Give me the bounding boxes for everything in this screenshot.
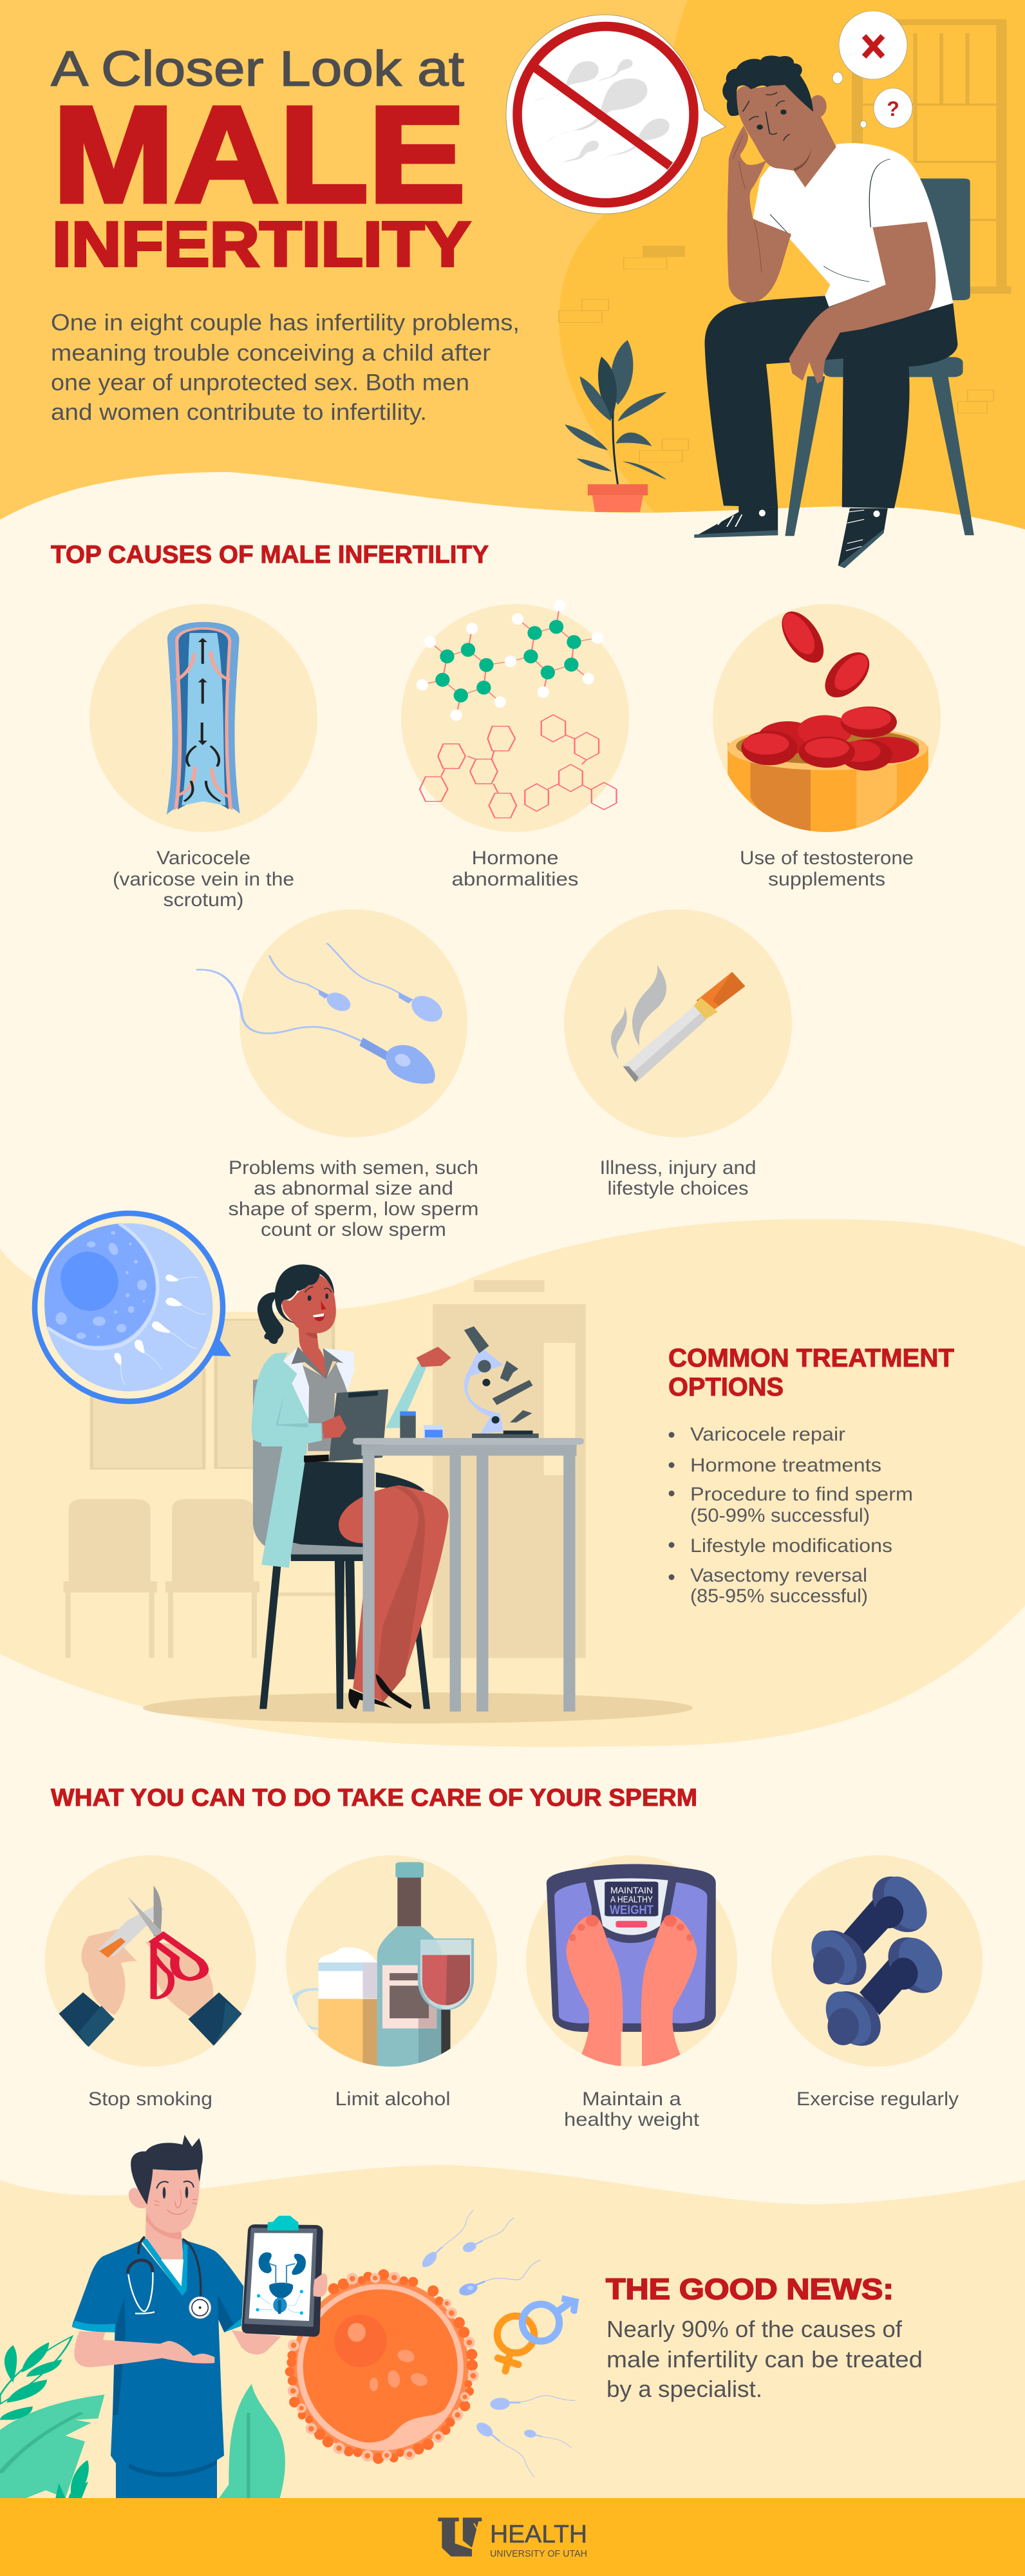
egg pale bump centres <box>290 2275 476 2459</box>
treatment list: Lifestyle modifications <box>690 1535 892 1557</box>
v-neck trim <box>142 2238 188 2296</box>
bubble shape <box>506 15 726 214</box>
scale display text: MAINTAIN <box>610 1885 653 1895</box>
thought bubbles: ? <box>887 97 899 120</box>
treatment list: (50-99% successful) <box>690 1505 870 1526</box>
no sperm speech bubble <box>506 15 726 214</box>
logo <box>438 2517 587 2559</box>
label: semen: Problems with semen, such <box>229 1157 478 1179</box>
panel: treatment background wave <box>0 1219 1025 1747</box>
title line 2: MALE <box>53 78 465 231</box>
neck <box>298 1325 326 1379</box>
chair <box>253 1379 430 1709</box>
ponytail <box>258 1293 283 1344</box>
doctor lower body <box>253 1347 451 1709</box>
neck <box>146 2208 183 2259</box>
label: hormone <box>452 848 578 890</box>
title line 3: INFERTILITY <box>52 209 471 279</box>
label: illness: Illness, injury and <box>600 1157 756 1179</box>
icon: hormone molecules <box>417 600 616 818</box>
man on chair <box>694 55 974 568</box>
vacuoles <box>370 2348 429 2391</box>
label: testosterone: supplements <box>768 869 885 890</box>
icon: beer, wine bottle and glass <box>294 1862 473 2067</box>
doctor at microscope <box>252 1264 451 1709</box>
lab coat <box>252 1352 322 1445</box>
thought bubble x <box>839 11 907 79</box>
scrubs <box>72 2239 243 2415</box>
header panel <box>0 0 1025 644</box>
male arrow head <box>561 2295 579 2314</box>
treatment list <box>690 1424 913 1607</box>
cell spots <box>55 1231 147 1339</box>
head and neck <box>736 82 836 187</box>
label: semen: count or slow sperm <box>261 1219 446 1240</box>
face features <box>743 92 790 140</box>
egg cell <box>44 1224 156 1346</box>
male symbol <box>522 2301 572 2341</box>
intro paragraph <box>51 309 520 425</box>
label: illness: lifestyle choices <box>608 1178 748 1199</box>
face <box>281 1275 336 1333</box>
hair <box>722 55 813 116</box>
egg cell <box>285 2269 479 2464</box>
doctor upper body <box>252 1264 354 1451</box>
treatment list: Hormone treatments <box>690 1455 881 1476</box>
header bottom wave <box>0 472 1025 644</box>
label: hormone: Hormone <box>471 848 559 869</box>
footer band <box>0 2498 1025 2576</box>
scale display text: A HEALTHY <box>610 1894 654 1904</box>
egg bump band <box>292 2279 469 2456</box>
pills in bowl <box>869 737 919 764</box>
ear <box>129 2188 147 2208</box>
beer mug <box>294 1947 377 2066</box>
thought bubbles <box>832 11 912 128</box>
floor shadow <box>143 1692 693 1723</box>
collar <box>292 1347 343 1379</box>
scale display text <box>610 1885 654 1917</box>
title line 1: A Closer Look at <box>51 41 464 97</box>
label: hormone: abnormalities <box>452 869 578 890</box>
tip labels <box>88 2088 959 2130</box>
falling pills <box>782 612 824 663</box>
magnified egg bubble <box>35 1213 231 1401</box>
left arm <box>728 126 791 303</box>
shirt <box>753 143 953 314</box>
wine glass <box>419 1939 473 2066</box>
cause circles <box>89 604 941 1137</box>
hair <box>275 1264 334 1323</box>
table <box>353 1438 584 1712</box>
label: testosterone: Use of testosterone <box>740 848 914 869</box>
intro paragraph: meaning trouble conceiving a child after <box>51 339 491 366</box>
tip circles <box>45 1855 983 2067</box>
face features <box>154 2181 197 2214</box>
grey sperm <box>531 59 670 163</box>
bubble inner <box>45 1224 212 1391</box>
gender symbols <box>497 2295 579 2371</box>
sample bottles <box>400 1412 443 1438</box>
treatment list: Vasectomy reversal <box>690 1565 867 1586</box>
shoes <box>348 1674 412 1709</box>
egg pale bumps <box>288 2272 479 2461</box>
kidneys illustration <box>259 2252 306 2298</box>
logo U mark <box>438 2517 482 2557</box>
intro paragraph: and women contribute to infertility. <box>51 399 427 425</box>
heading: take care: WHAT YOU CAN TO DO TAKE CARE OF YOUR SPERM <box>51 1785 697 1812</box>
feet <box>566 1915 697 2067</box>
trousers <box>704 296 957 508</box>
cause labels <box>113 848 914 1240</box>
shoes <box>694 506 778 536</box>
lapels <box>283 1347 309 1419</box>
good news paragraph: male infertility can be treated <box>607 2346 923 2372</box>
nurse with tablet <box>72 2135 328 2498</box>
label: varicocele: scrotum) <box>164 889 243 911</box>
nurse lower body <box>111 2412 224 2498</box>
skirt <box>293 1461 425 1547</box>
bubble tail <box>212 1340 231 1356</box>
sleeve trims <box>72 2318 241 2333</box>
label: limit alcohol: Limit alcohol <box>335 2088 451 2110</box>
face features <box>305 1287 332 1321</box>
lab coat lower <box>261 1421 308 1567</box>
treatment bullets <box>668 1432 675 1580</box>
panel: tips <box>45 1855 983 2130</box>
face <box>146 2169 200 2233</box>
clipboard and hand <box>323 1389 388 1461</box>
icon: varicose vein <box>167 622 240 815</box>
bowl <box>728 742 928 834</box>
treatment list: (85-95% successful) <box>690 1586 868 1607</box>
icon: scissors cutting cigarette <box>59 1886 242 2047</box>
window on wall and bricks <box>559 22 1011 462</box>
tablet <box>242 2216 323 2337</box>
label: maintain weight: healthy weight <box>564 2109 700 2130</box>
label: illness <box>600 1157 756 1199</box>
table and microscope <box>353 1327 584 1712</box>
good news paragraph: Nearly 90% of the causes of <box>607 2316 903 2342</box>
label: semen: as abnormal size and <box>254 1178 453 1199</box>
label: varicocele <box>113 848 294 911</box>
shirt <box>303 1361 348 1451</box>
clinic background <box>63 1280 586 1658</box>
microscope <box>464 1327 539 1439</box>
legs <box>339 1485 449 1701</box>
icon: testosterone supplements <box>728 609 928 834</box>
thought bubble question <box>874 88 912 128</box>
ear <box>809 95 827 117</box>
label: stop smoking: Stop smoking <box>88 2088 212 2110</box>
bubble ring <box>35 1213 223 1401</box>
nurse upper body <box>72 2135 328 2415</box>
good news heading: THE GOOD NEWS: <box>606 2273 894 2306</box>
egg orange bumps <box>285 2269 478 2464</box>
icon: scale and feet <box>547 1864 716 2067</box>
nucleus <box>61 1251 118 1311</box>
leaves <box>0 2336 285 2498</box>
icon: cigarette <box>611 965 745 1083</box>
logo: UNIVERSITY OF UTAH <box>490 2548 587 2559</box>
label: varicocele: Varicocele <box>156 848 250 869</box>
hair <box>131 2135 203 2204</box>
treatment heading: OPTIONS <box>668 1373 784 1401</box>
scale display text: WEIGHT <box>610 1904 654 1917</box>
female symbol <box>497 2316 534 2371</box>
crescent <box>364 2410 444 2448</box>
treatment list: Varicocele repair <box>690 1424 845 1445</box>
header dark background shape <box>559 0 1025 535</box>
belt <box>304 1455 329 1463</box>
good news text <box>606 2273 923 2402</box>
panel: good news background wave <box>0 2165 1025 2499</box>
good news paragraph <box>607 2316 923 2402</box>
treatment list: Procedure to find sperm <box>690 1484 913 1505</box>
header light background <box>0 0 1025 535</box>
treatment heading <box>668 1344 954 1401</box>
label: varicocele: (varicose vein in the <box>113 869 294 890</box>
egg membrane <box>297 2284 464 2450</box>
label: semen: shape of sperm, low sperm <box>228 1198 479 1220</box>
intro paragraph: one year of unprotected sex. Both men <box>51 369 469 395</box>
treatment options <box>668 1344 954 1607</box>
label: semen <box>228 1157 479 1240</box>
hand on tablet <box>314 2273 328 2297</box>
wine bottle <box>377 1862 442 2067</box>
icon: dumbbells <box>804 1875 950 2047</box>
intro paragraph: One in eight couple has infertility problems, <box>51 309 520 336</box>
small sperm <box>114 1274 182 1365</box>
icon: sperm problems <box>196 943 448 1084</box>
plant <box>565 340 667 512</box>
forearm and fist <box>386 1363 428 1428</box>
panel: causes <box>89 600 941 1240</box>
prohibition sign <box>518 26 694 203</box>
chair <box>785 178 974 536</box>
label: exercise: Exercise regularly <box>796 2088 959 2110</box>
right arm <box>789 222 936 384</box>
label: maintain weight <box>564 2088 700 2130</box>
man body and chair <box>694 143 974 568</box>
logo text: HEALTH <box>490 2521 587 2548</box>
treatment heading: COMMON TREATMENT <box>668 1344 954 1372</box>
good news paragraph: by a specialist. <box>607 2376 762 2402</box>
egg body <box>303 2289 458 2444</box>
label: maintain weight: Maintain a <box>582 2088 681 2110</box>
nucleus <box>334 2315 387 2367</box>
man head and left arm <box>722 55 836 303</box>
label: testosterone <box>740 848 914 890</box>
title <box>51 41 471 279</box>
arms <box>74 2331 214 2367</box>
stethoscope <box>127 2237 211 2318</box>
sperm around egg <box>422 2211 575 2477</box>
heading: top causes: TOP CAUSES OF MALE INFERTILITY <box>51 541 489 569</box>
